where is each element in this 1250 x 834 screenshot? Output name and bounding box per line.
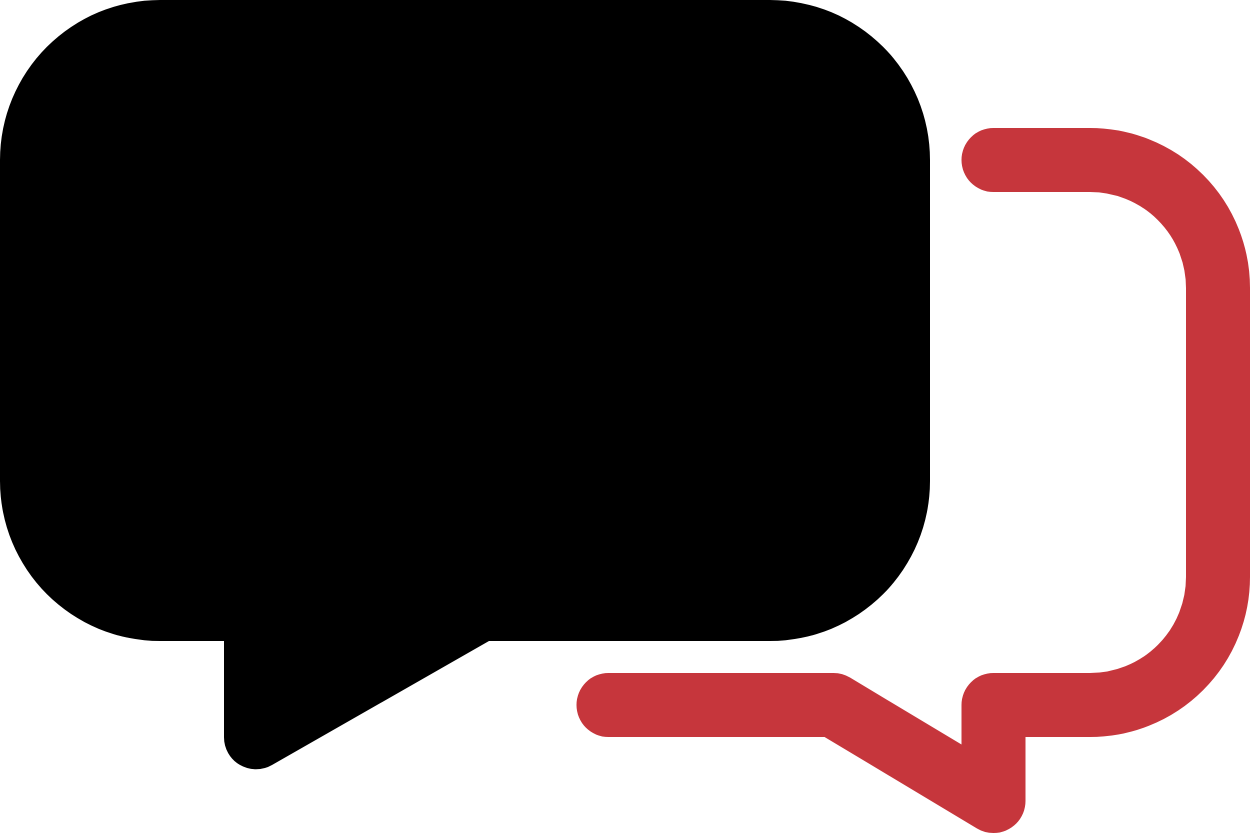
icon: red outlined speech bubble (608, 160, 1218, 801)
icon: black filled speech bubble (0, 0, 930, 769)
